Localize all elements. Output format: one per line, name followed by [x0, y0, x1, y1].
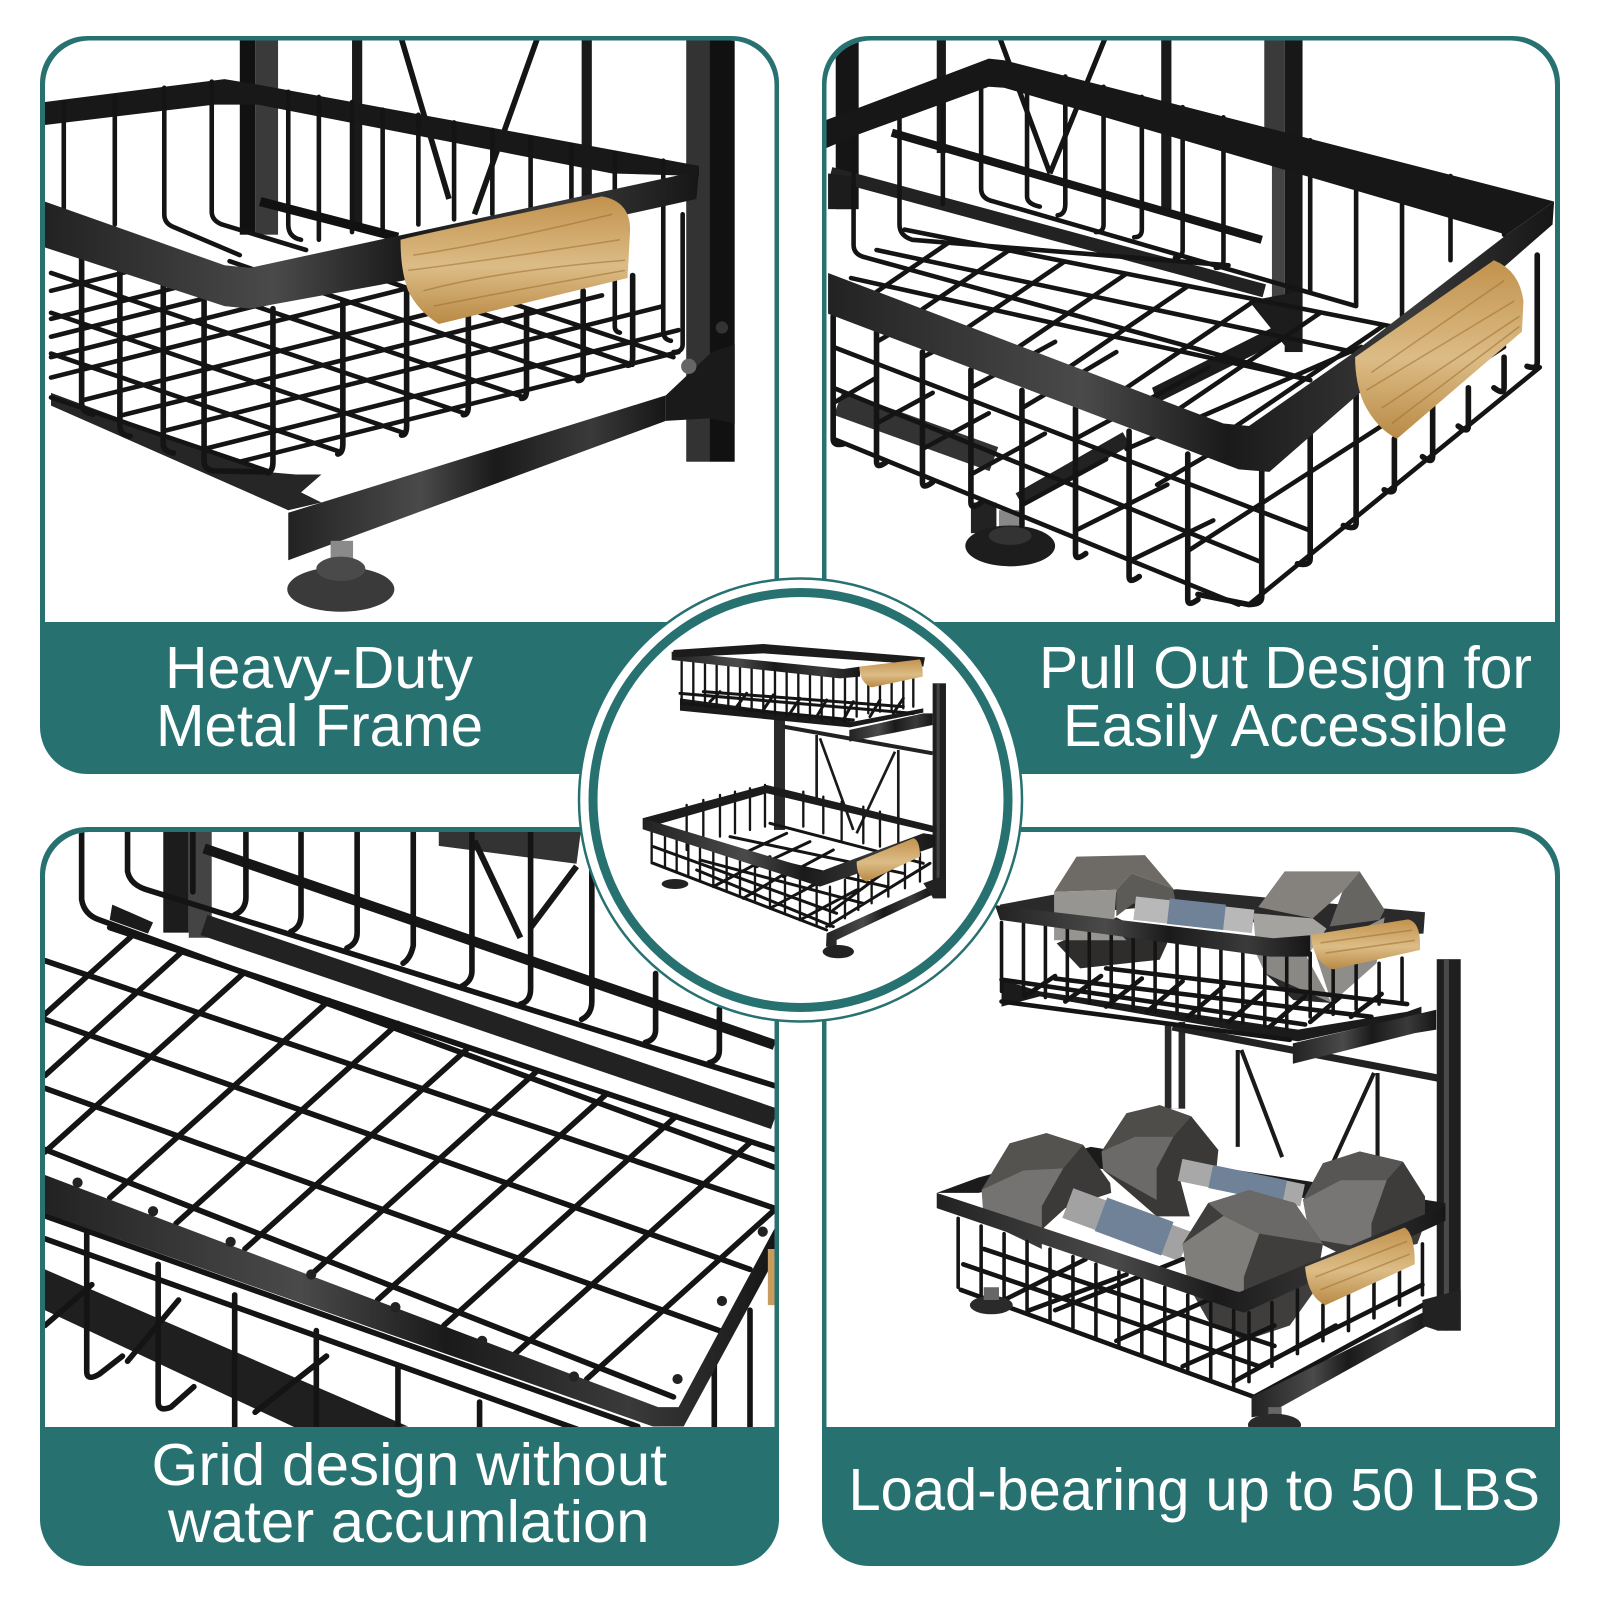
panel: pull out design — [822, 31, 1560, 774]
panel 2 photo area — [826, 40, 1555, 622]
caption: pull out design — [1039, 635, 1532, 759]
caption: heavy-duty metal frame — [156, 635, 483, 759]
panel 1 photo area — [45, 40, 774, 622]
photo: wire grid close-up — [45, 826, 823, 1433]
product photo: empty two-tier rack — [643, 644, 946, 958]
panel: load-bearing with dumbbells — [822, 827, 1560, 1566]
panel 4 teal card — [822, 827, 1560, 1566]
caption: grid design — [152, 1432, 667, 1555]
caption: pull out design: Easily Accessible — [1063, 693, 1508, 759]
medallion thick ring — [593, 592, 1008, 1008]
panel 4 photo area — [826, 832, 1555, 1427]
caption: heavy-duty metal frame: Heavy-Duty — [165, 635, 473, 701]
panel: grid design — [40, 826, 823, 1566]
photo: rack loaded with dumbbells — [937, 855, 1461, 1436]
photo: pulled-out basket — [827, 31, 1554, 605]
caption: heavy-duty metal frame: Metal Frame — [156, 693, 483, 759]
panel 1 teal card — [40, 36, 779, 774]
caption: grid design: water accumlation — [167, 1489, 650, 1555]
photo: metal frame close-up — [45, 31, 735, 612]
panel: heavy-duty metal frame — [40, 31, 779, 774]
panel 3 teal card — [40, 827, 779, 1566]
caption: pull out design: Pull Out Design for — [1039, 635, 1532, 701]
panel 2 teal card — [822, 36, 1560, 774]
panel 3 photo area — [45, 832, 774, 1427]
medallion white disc with thin outer ring — [579, 578, 1022, 1022]
caption: load-bearing: Load-bearing up to 50 LBS — [848, 1457, 1540, 1523]
center medallion — [579, 578, 1022, 1022]
caption: grid design: Grid design without — [152, 1432, 667, 1498]
